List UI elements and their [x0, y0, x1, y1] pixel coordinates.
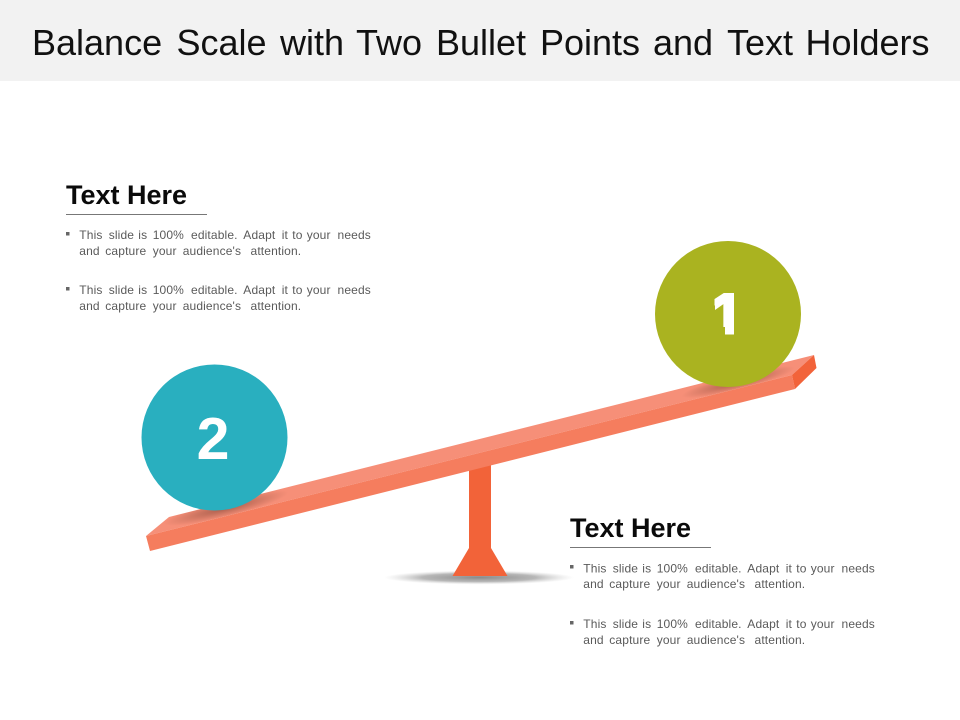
title: Scale — [176, 22, 267, 63]
text block: bottom right: 100% — [657, 562, 688, 576]
text block: top left: This — [79, 228, 103, 242]
text block: bottom right: your — [657, 577, 681, 591]
text block: top left: Adapt — [243, 283, 276, 297]
text block: top left: needs — [338, 228, 371, 242]
ground shadow — [384, 570, 574, 584]
text block: bottom right: Adapt — [747, 617, 780, 631]
text block: bottom right: is — [642, 562, 651, 576]
text block: bottom right: your — [811, 562, 835, 576]
text block: top left: Adapt — [243, 228, 276, 242]
text block: bottom right: to — [796, 617, 807, 631]
text block: bottom right: your — [811, 617, 835, 631]
text block: top left: This — [79, 283, 103, 297]
text block: bottom right: slide — [613, 617, 638, 631]
title: Text — [727, 22, 793, 63]
text block: bottom right: it — [786, 617, 793, 631]
text block: top left: audience's — [183, 244, 241, 258]
text block: top left: 100% — [153, 228, 184, 242]
text block: top left: capture — [105, 299, 146, 313]
text block: top left: 100% — [153, 283, 184, 297]
text block: bottom right: your — [657, 633, 681, 647]
title: Holders — [806, 22, 930, 63]
contact shadow: ball 2 — [171, 492, 282, 524]
text block: bottom right: editable. — [695, 562, 742, 576]
text block: top left: needs — [338, 283, 371, 297]
title: Points — [540, 22, 640, 63]
text block: bottom right: audience's — [687, 577, 745, 591]
text block: bottom right: 100% — [657, 617, 688, 631]
text block: bottom right: Text Here — [570, 513, 691, 543]
text block: top left: your — [153, 244, 177, 258]
text block: top left: editable. — [191, 228, 238, 242]
text block: top left: is — [138, 228, 147, 242]
ball 2: 2 — [197, 406, 229, 472]
text block: top left: it — [282, 283, 289, 297]
text block: top left: your — [307, 283, 331, 297]
text block: bottom right: needs — [842, 562, 875, 576]
text block: top left: audience's — [183, 299, 241, 313]
text block: bottom right: audience's — [687, 633, 745, 647]
text block: bottom right: attention. — [754, 577, 805, 591]
text block: bottom right: is — [642, 617, 651, 631]
text block: bottom right: and — [583, 577, 604, 591]
text block: top left — [66, 180, 371, 313]
contact shadow: ball 1 — [688, 368, 788, 396]
text block: bottom right: This — [583, 617, 607, 631]
text block: top left: slide — [109, 228, 134, 242]
text block: bottom right: Adapt — [747, 562, 780, 576]
text block: bottom right: and — [583, 633, 604, 647]
text block: top left: to — [292, 283, 303, 297]
title: Bullet — [436, 22, 526, 63]
title: and — [653, 22, 713, 63]
text block: bottom right: slide — [613, 562, 638, 576]
text block: top left: to — [292, 228, 303, 242]
ball 1 — [655, 241, 801, 387]
text block: top left: attention. — [250, 299, 301, 313]
text block: top left: and — [79, 244, 100, 258]
title: Balance — [32, 22, 162, 63]
text block: bottom right: attention. — [754, 633, 805, 647]
text block: top left: capture — [105, 244, 146, 258]
text block: bottom right: to — [796, 562, 807, 576]
text block: top left: attention. — [250, 244, 301, 258]
text block: bottom right: capture — [609, 633, 650, 647]
text block: top left: it — [282, 228, 289, 242]
text block: bottom right — [570, 513, 875, 647]
text block: top left: and — [79, 299, 100, 313]
title band — [0, 0, 960, 81]
text block: bottom right: capture — [609, 577, 650, 591]
text block: top left: Text Here — [66, 180, 187, 210]
text block: top left: slide — [109, 283, 134, 297]
title: Two — [356, 22, 422, 63]
text block: bottom right: it — [786, 562, 793, 576]
text block: bottom right: needs — [842, 617, 875, 631]
text block: top left: is — [138, 283, 147, 297]
text block: bottom right: This — [583, 562, 607, 576]
title: with — [279, 22, 344, 63]
text block: top left: your — [307, 228, 331, 242]
seesaw plank — [146, 355, 816, 551]
ball 1: 1 — [709, 280, 743, 348]
text block: bottom right: editable. — [695, 617, 742, 631]
ball 2 — [142, 364, 288, 510]
seesaw stand — [452, 462, 508, 576]
text block: top left: your — [153, 299, 177, 313]
text block: top left: editable. — [191, 283, 238, 297]
